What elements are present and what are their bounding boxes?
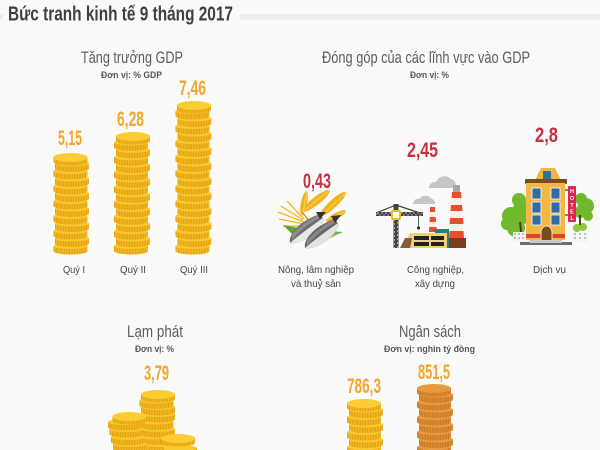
panel: budget: [347, 322, 475, 450]
label: agriculture line 2: và thuỷ sản: [291, 278, 341, 290]
icon: crane and factory: [376, 176, 466, 248]
icon: hotel: E: [570, 210, 574, 216]
coin stack: budget spending: [417, 384, 453, 450]
label: agriculture: Nông, lâm nghiệp: [278, 264, 354, 276]
label: quarter II: Quý II: [120, 264, 146, 276]
icon: hotel: L: [570, 216, 574, 222]
coin stack: quarter III: [176, 101, 212, 254]
coin piles: inflation: [108, 390, 197, 450]
label: quarter I: Quý I: [63, 264, 85, 276]
value: quarter III: 7,46: [179, 77, 206, 100]
heading: sector contribution: Đóng góp của các lĩnh vực vào GDP: [322, 48, 530, 67]
icon: hotel: T: [570, 203, 574, 209]
icon: hotel: [501, 168, 594, 245]
unit: budget: Đơn vị: nghìn tỷ đồng: [384, 344, 475, 355]
value: inflation: 3,79: [144, 362, 169, 385]
label: industry: Công nghiệp,: [407, 264, 464, 276]
icon: hotel: H: [570, 189, 574, 195]
unit: inflation: Đơn vị: %: [135, 344, 174, 355]
unit: sector contribution: Đơn vị: %: [410, 70, 449, 81]
heading: GDP growth: Tăng trưởng GDP: [81, 48, 183, 67]
value: budget spending: 851,5: [418, 361, 450, 384]
heading: inflation: Lạm phát: [127, 322, 183, 341]
title: Bức tranh kinh tế 9 tháng 2017: [8, 4, 233, 26]
icon: wheat and fish: [278, 187, 348, 248]
coin stack: quarter I: [54, 153, 89, 254]
icon: hotel: O: [570, 196, 575, 202]
label: services: Dịch vụ: [533, 264, 566, 276]
panel: sector contribution: [278, 48, 594, 290]
value: quarter II: 6,28: [117, 108, 144, 131]
coin stack: budget revenue: [347, 399, 383, 450]
value: services: 2,8: [535, 124, 558, 147]
value: budget revenue: 786,3: [347, 375, 381, 398]
panel: GDP growth: [54, 48, 212, 276]
value: agriculture: 0,43: [303, 170, 331, 193]
label: industry line 2: xây dựng: [415, 278, 455, 290]
unit: GDP growth: Đơn vị: % GDP: [101, 70, 163, 81]
heading: budget: Ngân sách: [399, 322, 461, 341]
coin stack: quarter II: [114, 132, 150, 254]
value: industry: 2,45: [407, 139, 438, 162]
label: quarter III: Quý III: [180, 264, 208, 276]
value: quarter I: 5,15: [58, 127, 82, 150]
panel: inflation: [108, 322, 197, 450]
